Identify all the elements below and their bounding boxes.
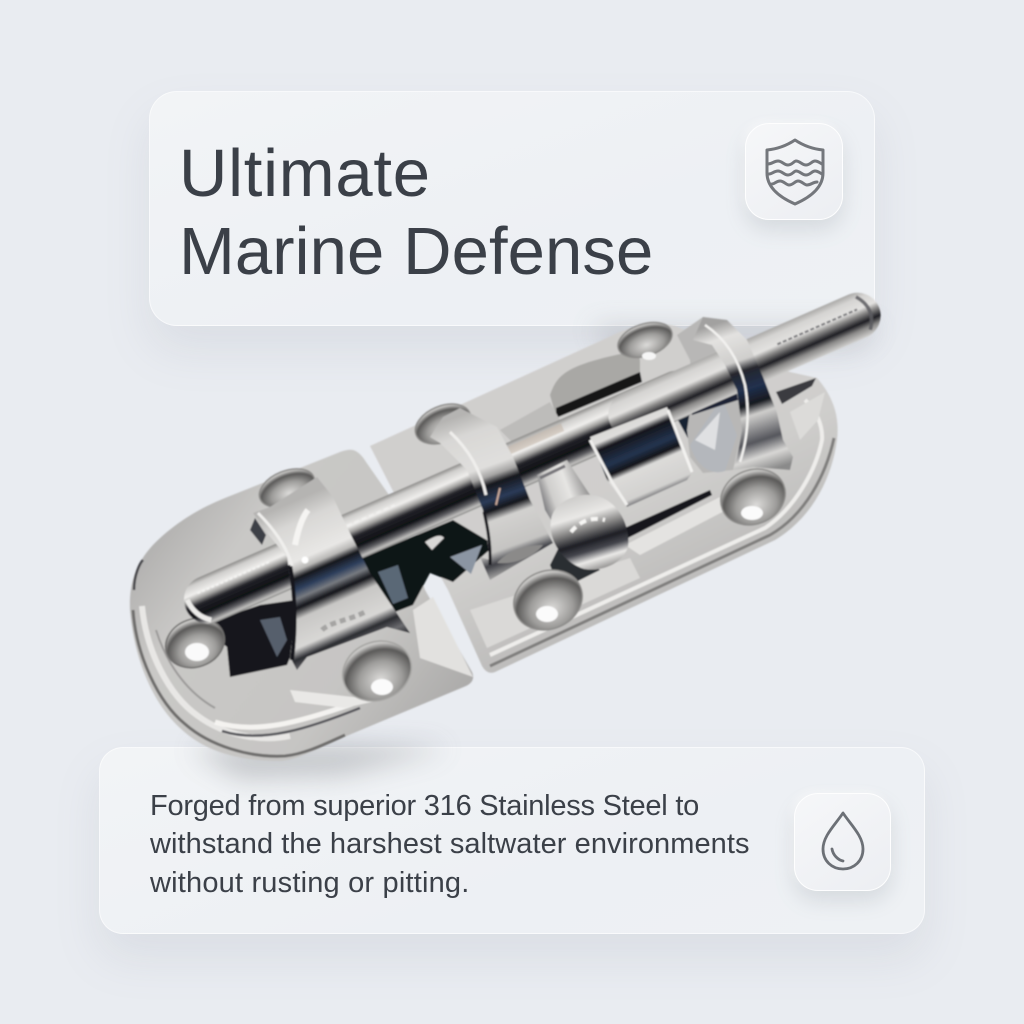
left mounting plate (130, 450, 473, 761)
text block: description: without rusting or pitting. (150, 867, 469, 899)
latch cast shadow (190, 326, 880, 778)
heading: Ultimate Marine Defense: Ultimate (179, 136, 431, 211)
shadowed recesses under the bolt (200, 378, 825, 677)
right strap front (693, 317, 793, 470)
heading: Ultimate Marine Defense (179, 136, 653, 289)
panel: description card (99, 747, 925, 934)
heading: Ultimate Marine Defense: Marine Defense (179, 214, 653, 289)
icon tile: water drop (794, 793, 891, 891)
screw holes (159, 316, 794, 711)
slide guide notch (500, 352, 642, 445)
text block: description: Forged from superior 316 Stainless Steel to (150, 790, 699, 822)
icon tile: shield with waves (745, 123, 843, 220)
bolt bar (176, 285, 888, 631)
right strap back and window (677, 317, 742, 473)
middle strap (430, 408, 553, 580)
text block: description: withstand the harshest saltwater environments (150, 828, 750, 860)
text block: description (150, 790, 750, 899)
left strap (250, 477, 410, 670)
right mounting plate (370, 324, 838, 673)
knob handle (537, 460, 628, 570)
panel: headline card (149, 91, 875, 326)
sliding collar (590, 407, 692, 507)
